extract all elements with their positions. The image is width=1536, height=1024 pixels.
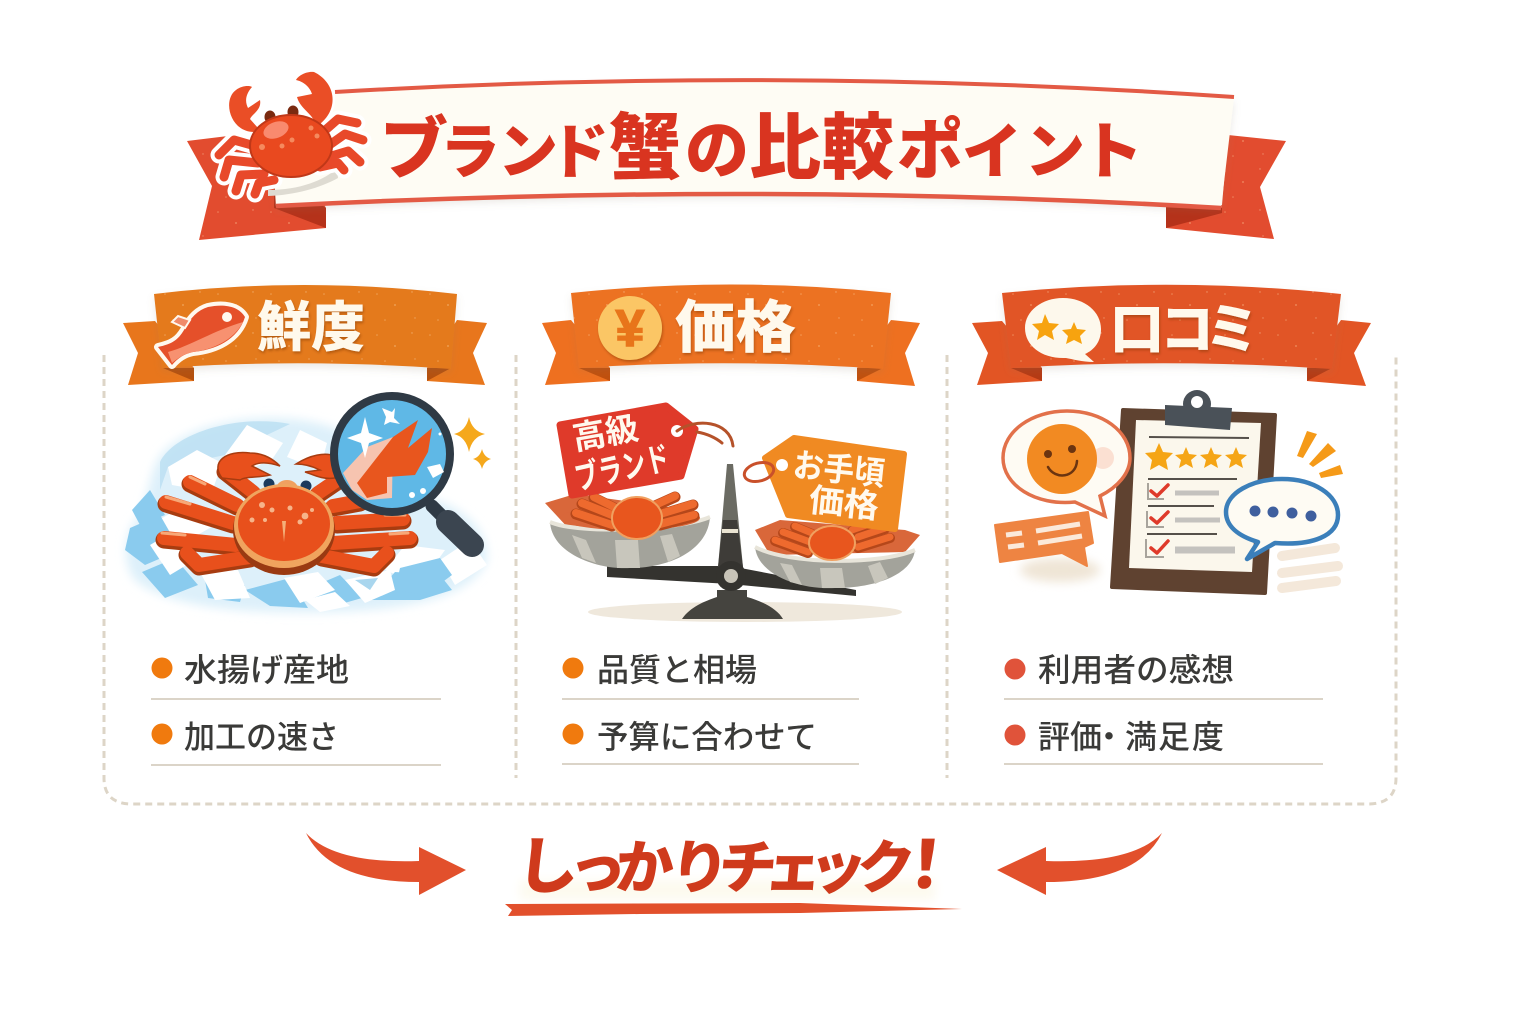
title: ト <box>1081 118 1143 187</box>
price tag: premium brand: ブランド <box>571 439 673 497</box>
left banner tail <box>187 136 326 240</box>
panel: price <box>542 284 920 764</box>
callout glow <box>520 880 935 900</box>
right claw <box>296 72 333 124</box>
title: ポ <box>897 113 963 187</box>
price tag: premium brand: 高級 <box>570 409 641 457</box>
checklist <box>1146 437 1249 557</box>
title: イ <box>962 119 1022 186</box>
rating stars <box>1145 443 1247 470</box>
icon: fish <box>158 306 245 365</box>
left pincer <box>218 453 280 480</box>
crab shadow <box>268 168 338 196</box>
clipboard board <box>1112 410 1275 593</box>
list: freshness <box>151 652 441 765</box>
title: ン <box>1025 119 1085 186</box>
magnifying glass <box>334 396 472 545</box>
title: ブ <box>380 112 448 188</box>
crab eyes <box>264 106 298 124</box>
orange burst lines <box>1297 431 1343 478</box>
arrow: left <box>306 833 466 895</box>
title: ド <box>549 119 609 186</box>
list: reviews <box>1004 652 1323 764</box>
callout text: ェ <box>762 836 826 901</box>
callout <box>505 829 962 916</box>
crab body <box>250 115 332 177</box>
ribbon: freshness <box>123 285 487 385</box>
clipboard clip <box>1165 390 1232 430</box>
panel: freshness <box>123 285 491 765</box>
illustration: review clipboard <box>995 390 1343 593</box>
item: customer impressions: 利用者の感想 <box>1038 652 1234 688</box>
illustration: balance scale <box>545 406 920 622</box>
title: ラ <box>440 119 500 186</box>
title: 蟹 <box>609 109 681 189</box>
price tag: affordable price <box>742 438 904 529</box>
scale post <box>682 464 783 619</box>
ribbon: reviews <box>972 285 1371 386</box>
magnifier lens <box>334 396 450 512</box>
callout text: っ <box>566 836 630 901</box>
left claw <box>229 86 260 132</box>
right pincer <box>296 454 335 478</box>
item: quality and market price: 品質と相場 <box>597 652 757 688</box>
title: 較 <box>822 109 894 189</box>
price tag: affordable price: 価格 <box>807 481 881 525</box>
clipboard paper <box>1129 420 1261 572</box>
crab eyes <box>264 478 312 492</box>
title banner <box>187 80 1286 240</box>
ice bed <box>125 418 487 612</box>
callout text: チ <box>716 836 780 901</box>
left pan <box>545 494 710 568</box>
arrow: right <box>997 833 1162 895</box>
item: match your budget <box>562 719 859 764</box>
magnifier handle <box>432 506 472 545</box>
icon: sparkles <box>454 417 491 469</box>
brush underline <box>505 903 962 916</box>
crab legs <box>219 119 363 194</box>
item: quality and market price <box>562 652 859 699</box>
callout text: ！ <box>890 829 962 903</box>
item: match your budget: 予算に合わせて <box>597 719 817 755</box>
orange comment box <box>995 512 1100 582</box>
item: landing area: 水揚げ産地 <box>184 652 349 688</box>
banner body <box>274 81 1234 208</box>
dashed panel frame <box>104 355 1396 804</box>
crab shell <box>233 480 335 575</box>
heading: reviews: 口コミ <box>1110 300 1259 360</box>
callout text: か <box>613 836 677 901</box>
item: landing area <box>151 652 441 699</box>
scale beam <box>607 566 856 596</box>
list: price <box>562 652 859 764</box>
heading: price: 価格 <box>675 296 796 360</box>
ribbon: price <box>542 284 920 386</box>
banner top edge <box>335 80 1234 97</box>
callout text: し <box>514 833 582 902</box>
crab legs and claws <box>162 470 410 568</box>
right pan <box>755 520 920 588</box>
price tag: premium brand <box>560 406 733 497</box>
price tag: affordable price: お手頃 <box>791 446 887 493</box>
icon: title crab <box>219 72 363 196</box>
title: の <box>685 115 749 187</box>
callout text: ク <box>854 836 918 901</box>
illustration: crab on ice <box>125 396 491 612</box>
title: 比 <box>749 109 821 189</box>
item: customer impressions <box>1004 652 1323 699</box>
right banner tail <box>1166 135 1286 239</box>
icon: yen coin <box>598 296 662 360</box>
item: processing speed: 加工の速さ <box>184 719 339 755</box>
panel: reviews <box>972 285 1371 764</box>
banner bottom edge <box>276 194 1221 208</box>
smiley speech bubble <box>1003 411 1130 516</box>
item: processing speed <box>151 719 441 765</box>
heading: freshness: 鮮度 <box>257 298 365 358</box>
blue speech bubble <box>1226 479 1338 559</box>
icon: star speech bubble <box>1025 298 1101 362</box>
icon: yen coin: ¥ <box>616 300 645 358</box>
title: ン <box>498 119 558 186</box>
callout text: ッ <box>806 836 870 901</box>
callout text: り <box>668 836 732 901</box>
scale shadow <box>588 602 902 622</box>
item: ratings and satisfaction <box>1004 719 1323 764</box>
lens sparkles <box>347 408 444 498</box>
item: ratings and satisfaction: 評価・満足度 <box>1038 719 1224 755</box>
beige brush strokes <box>1282 548 1338 588</box>
